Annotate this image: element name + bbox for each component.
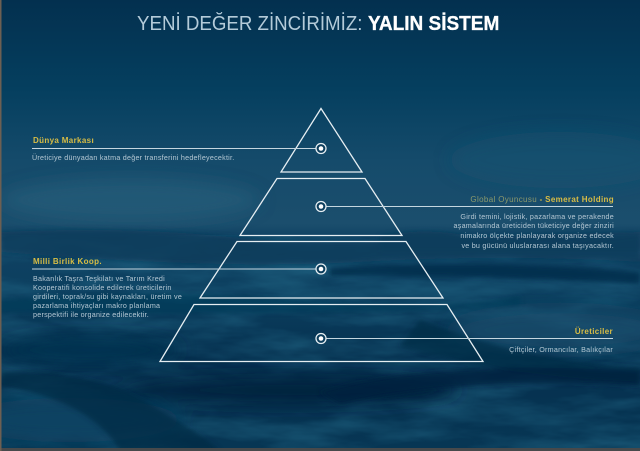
leader line and marker: Üreticiler (316, 334, 613, 344)
pyramid tier 1: apex triangle (281, 108, 362, 172)
pyramid tier 4 (160, 304, 483, 362)
text: Milli Birlik Koop. description: Kooperatifi konsolide edilerek üreticilerin (33, 284, 172, 292)
text: Dünya Markası description: Üreticiye dünyadan katma değer transferini hedefleyecektir. (32, 154, 234, 162)
leader line and marker: Dünya Markası (32, 144, 326, 154)
text: Global Oyuncusu description: Girdi temini, lojistik, pazarlama ve perakende (460, 212, 614, 220)
title (137, 12, 499, 35)
title: YALIN SİSTEM (368, 13, 499, 35)
text: Global Oyuncusu description: aşamalarında üreticiden tüketiciye değer zinziri (454, 222, 614, 230)
heading: Dünya Markası: Dünya Markası (33, 136, 94, 145)
heading: Üreticiler: Üreticiler (575, 327, 613, 336)
text: Milli Birlik Koop. description: girdileri, toprak/su gibi kaynakları, üretim ve (33, 293, 182, 301)
leader line and marker: Global Oyuncusu (316, 202, 613, 212)
text: Global Oyuncusu description (454, 212, 614, 250)
leader line and marker: Milli Birlik Koop. (32, 264, 326, 274)
pyramid tier 2 (240, 178, 402, 236)
text: Milli Birlik Koop. description: pazarlama ihtiyaçları makro planlama (33, 302, 160, 310)
text: Milli Birlik Koop. description: perspektifi ile organize edilecektir. (33, 311, 149, 319)
text: Milli Birlik Koop. description: Bakanlık Taşra Teşkilatı ve Tarım Kredi (33, 275, 165, 283)
title: YENİ DEĞER ZİNCİRİMİZ: (137, 13, 362, 35)
text: Global Oyuncusu description: nimakro ölçekte planlayarak organize edecek (460, 232, 614, 240)
heading: Milli Birlik Koop.: Milli Birlik Koop. (33, 257, 102, 266)
text: Global Oyuncusu description: ve bu gücünü uluslararası alana taşıyacaktır. (461, 242, 614, 250)
pyramid tier 3 (200, 242, 443, 298)
text: Milli Birlik Koop. description (33, 275, 182, 319)
text: Üreticiler description: Çiftçiler, Ormancılar, Balıkçılar (509, 346, 613, 354)
heading: Global Oyuncusu - Semerat Holding: Global Oyuncusu - Semerat Holding (470, 195, 614, 204)
